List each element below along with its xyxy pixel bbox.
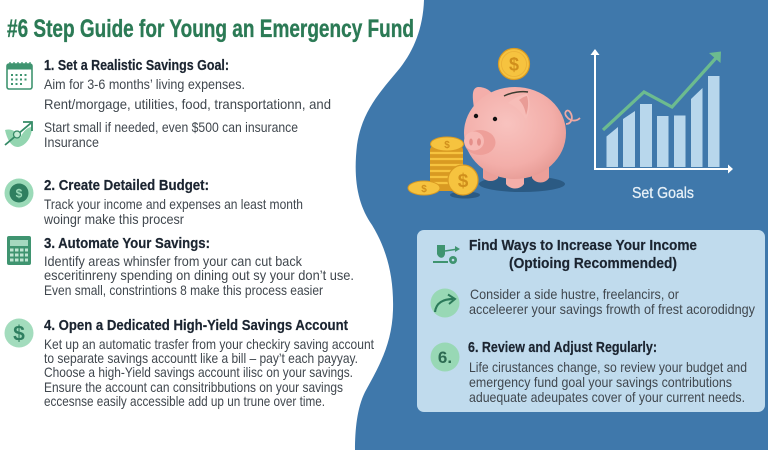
step 3 text: 3. Automate Your Savings: bbox=[44, 236, 210, 252]
step 1 text: Start small if needed, even $500 can insurance bbox=[44, 119, 298, 135]
title: #6 Step Guide for Young an Emergency Fund bbox=[7, 15, 414, 43]
white curved left panel bbox=[0, 0, 424, 450]
step 1 text: Aim for 3-6 months’ living expenses. bbox=[44, 76, 245, 92]
income body text bbox=[469, 286, 755, 317]
step 1 text: Insurance bbox=[44, 134, 99, 150]
income heading bbox=[469, 238, 697, 272]
step 1 text bbox=[44, 58, 331, 150]
illustration: coin stack bbox=[408, 137, 480, 198]
step 2 text: Track your income and expenses an least month bbox=[44, 196, 303, 212]
step 4 text: to separate savings accountt like a bill – pay’t each payyay. bbox=[44, 350, 358, 366]
icon: number six: 6. bbox=[438, 348, 452, 367]
step 4 text: 4. Open a Dedicated High-Yield Savings Account bbox=[44, 318, 348, 334]
illustration: piggy bank bbox=[464, 87, 580, 192]
step 2 text bbox=[43, 178, 303, 227]
illustration: coin stack: $ bbox=[458, 171, 469, 192]
income heading: (Optioing Recommended) bbox=[509, 256, 677, 272]
icon: dollar circle bbox=[4, 318, 34, 348]
step 6 text: emergency fund goal your savings contributions bbox=[469, 374, 732, 390]
icon: growth leaf bbox=[5, 122, 32, 147]
chart: growth bars bbox=[590, 49, 733, 174]
illustration: falling coin bbox=[498, 48, 530, 80]
step 6 text: 6. Review and Adjust Regularly: bbox=[468, 340, 657, 356]
step 4 text: Ensure the account can consitribbutions on your savings bbox=[44, 379, 343, 395]
step 4 text: Ket up an automatic trasfer from your checkiry saving account bbox=[44, 336, 374, 352]
step 3 text bbox=[44, 236, 354, 298]
income body text: Consider a side hustre, freelancirs, or bbox=[470, 286, 679, 302]
icon: calendar bbox=[7, 62, 32, 89]
step 1 text: 1. Set a Realistic Savings Goal: bbox=[44, 58, 229, 74]
step 4 text bbox=[44, 318, 374, 409]
step 4 text: Choose a high-Yield savings account ilisc on your savings. bbox=[44, 364, 353, 380]
icon: curved arrow bbox=[430, 288, 460, 318]
icon: dollar badge: $ bbox=[16, 186, 23, 200]
icon: calculator bbox=[7, 236, 31, 265]
chart caption: Set Goals bbox=[632, 185, 694, 202]
step 3 text: Even small, constrintions 8 make this process easier bbox=[44, 282, 323, 298]
step 2 text: 2. Create Detailed Budget: bbox=[44, 178, 209, 194]
icon: dollar circle: $ bbox=[13, 322, 25, 346]
icon: dollar badge bbox=[4, 178, 34, 208]
step 1 text: Rent/morgage, utilities, food, transportationn, and bbox=[44, 96, 331, 112]
step 2 text: woingr make this procesr bbox=[43, 211, 184, 227]
income heading: Find Ways to Increase Your Income bbox=[469, 238, 697, 254]
step 6 text bbox=[468, 340, 747, 405]
step 3 text: esceritinreny spending on dining out sy your don’t use. bbox=[44, 267, 354, 283]
step 4 text: eccesnse easily accessible add up un trune over time. bbox=[44, 393, 325, 409]
icon: income bbox=[433, 240, 460, 264]
illustration: coin stack: $ bbox=[421, 184, 427, 195]
step 3 text: Identify areas whinsfer from your can cut back bbox=[44, 253, 303, 269]
icon: number six bbox=[430, 342, 460, 372]
panel: income and review bbox=[417, 230, 765, 412]
illustration: coin stack: $ bbox=[444, 140, 450, 151]
illustration: falling coin: $ bbox=[509, 54, 519, 74]
